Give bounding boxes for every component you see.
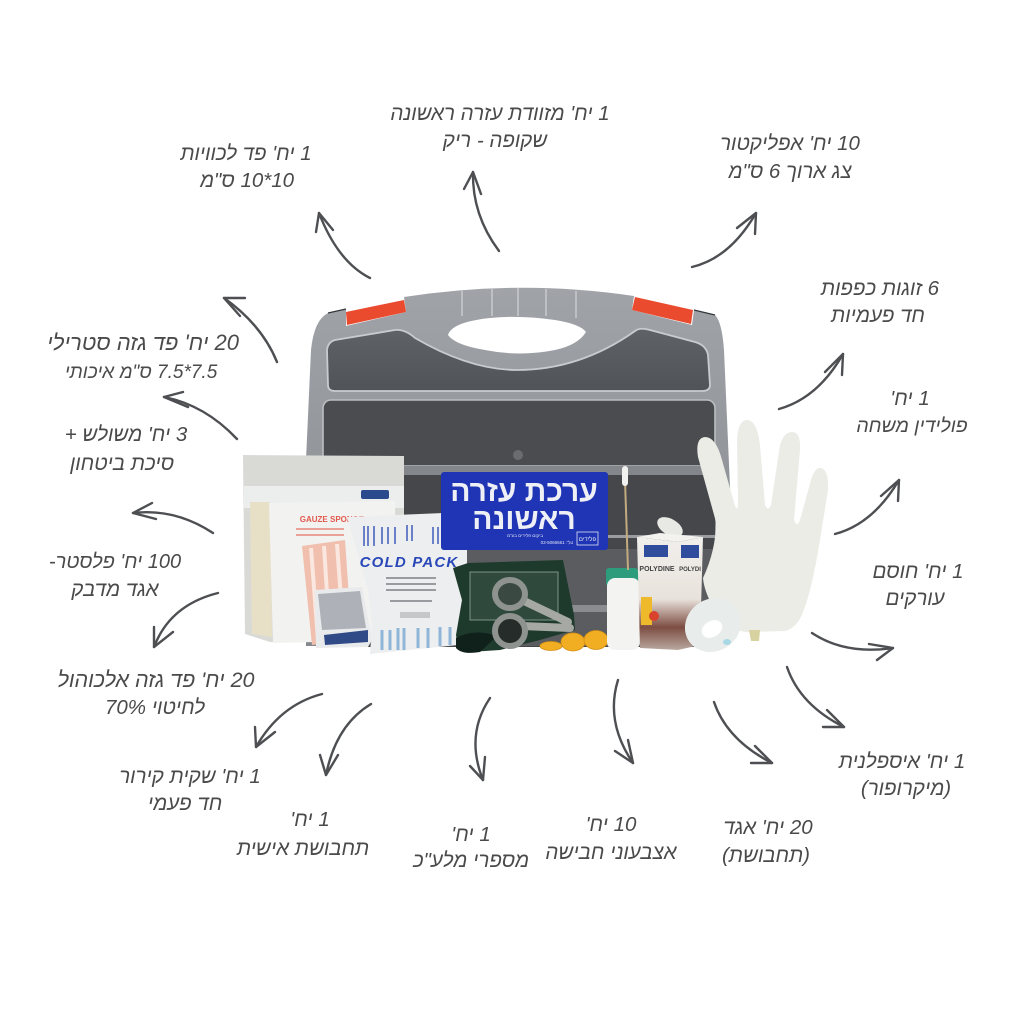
arrow: polydine ointment <box>835 480 899 534</box>
label: polydine ointment: פולידין משחה <box>856 415 968 437</box>
label: sterile gauze: 7.5*7.5 ס"מ איכותי <box>65 362 218 383</box>
label: personal dressing <box>236 808 369 860</box>
personal dressing <box>453 560 575 653</box>
white gauze roll <box>607 578 640 650</box>
arrow: micropore tape <box>787 667 844 727</box>
label: tourniquet <box>872 560 964 610</box>
label: cold pack <box>119 765 261 815</box>
label: triangular bandage: סיכת ביטחון <box>69 452 174 475</box>
label: bandage <box>722 816 813 867</box>
label: adhesive plaster: אגד מדבק <box>70 578 160 601</box>
carrying case <box>306 288 731 647</box>
label: gloves: 6 זוגות כפפות <box>820 277 940 300</box>
scissors <box>495 580 570 646</box>
label: alcohol pads: לחיטוי 70% <box>105 696 205 719</box>
first aid kit photo <box>243 288 828 663</box>
yellow finger cots <box>540 630 608 651</box>
blue sign: ביקום פלידים בע"מ <box>507 533 543 538</box>
label: polydine ointment: 1 יח' <box>890 387 930 410</box>
label: scissors: 1 יח' <box>451 823 491 846</box>
arrow: cold pack <box>255 694 322 747</box>
label: bandage: 20 יח' אגד <box>723 816 813 839</box>
other glove thumb <box>654 513 686 541</box>
red hinge left <box>346 300 406 325</box>
label: finger cots: אצבעוני חבישה <box>545 841 678 864</box>
label: cold pack: 1 יח' שקית קירור <box>119 765 261 788</box>
blue sign: ערכת עזרה <box>450 475 598 508</box>
arrow: finger cots <box>614 680 633 763</box>
label: applicator <box>720 132 861 183</box>
green tape roll <box>606 568 638 586</box>
polydine box: POLYDI <box>679 567 701 573</box>
arrow: sterile gauze <box>224 298 277 362</box>
blue sign: פלידים <box>579 535 596 543</box>
arrow: suitcase <box>464 172 499 251</box>
polydine box <box>637 533 703 650</box>
arrow: personal dressing <box>320 704 371 775</box>
cold pack <box>347 512 467 654</box>
label: micropore tape <box>838 750 965 800</box>
blue sign: טל': 03-5066561 <box>541 540 573 545</box>
label: cold pack: חד פעמי <box>148 792 222 815</box>
red hinge right <box>632 297 693 324</box>
blue sign <box>441 472 608 550</box>
arrow: tourniquet <box>812 633 893 660</box>
arrow: adhesive plaster <box>133 503 213 533</box>
label: scissors <box>412 823 529 872</box>
label: sterile gauze <box>47 330 240 383</box>
label: micropore tape: (מיקרופור) <box>861 777 951 800</box>
label: finger cots <box>545 813 678 864</box>
cotton swab <box>622 466 628 570</box>
label: tourniquet: 1 יח' חוסם <box>872 560 964 583</box>
label: alcohol pads <box>58 668 255 719</box>
label: alcohol pads: 20 יח' פד גזה אלכוהול <box>58 668 255 692</box>
label: adhesive plaster <box>49 551 181 601</box>
arrow: triangular bandage <box>164 392 237 439</box>
label: gloves <box>820 277 940 327</box>
adhesive bandages <box>302 540 352 645</box>
alcohol pad box <box>315 587 372 648</box>
gauze pad <box>269 501 396 643</box>
latex glove <box>697 420 828 641</box>
label: triangular bandage <box>65 423 188 475</box>
arrow: alcohol pads <box>154 593 218 647</box>
label: burn pad: 1 יח' פד לכוויות <box>179 142 312 165</box>
label: sterile gauze: 20 יח' פד גזה סטרילי <box>47 330 240 355</box>
label: bandage: (תחבושת) <box>722 844 810 867</box>
label: micropore tape: 1 יח' איספלנית <box>838 750 965 773</box>
label: suitcase <box>390 102 610 152</box>
arrow: scissors <box>470 698 490 780</box>
label: burn pad <box>179 142 312 192</box>
label: gloves: חד פעמיות <box>830 304 925 327</box>
label: adhesive plaster: 100 יח' פלסטר- <box>49 551 181 573</box>
label: applicator: צג ארוך 6 ס"מ <box>727 160 852 183</box>
blue sign: ראשונה <box>472 503 576 536</box>
label: applicator: 10 יח' אפליקטור <box>720 132 861 155</box>
arrow: bandage <box>714 702 772 763</box>
label: burn pad: 10*10 ס"מ <box>199 169 295 192</box>
label: suitcase: שקופה - ריק <box>442 129 548 152</box>
arrow: gloves <box>779 354 843 409</box>
arrow: applicator <box>692 213 756 267</box>
arrow: burn pad <box>316 213 370 278</box>
label: suitcase: 1 יח' מזוודת עזרה ראשונה <box>390 102 610 125</box>
adhesive tape ring <box>674 587 752 663</box>
label: finger cots: 10 יח' <box>586 813 637 836</box>
label: scissors: מספרי מלע"כ <box>412 849 529 872</box>
polydine box: POLYDINE <box>639 566 675 573</box>
label: polydine ointment <box>856 387 968 437</box>
sterile gauze bag <box>243 455 404 642</box>
label: personal dressing: תחבושת אישית <box>236 837 369 860</box>
gauze pad: GAUZE SPONGE <box>300 515 365 524</box>
cold pack: COLD PACK <box>360 554 458 571</box>
label: personal dressing: 1 יח' <box>290 808 330 831</box>
label: triangular bandage: 3 יח' משולש + <box>65 423 188 446</box>
label: tourniquet: עורקים <box>885 587 946 610</box>
